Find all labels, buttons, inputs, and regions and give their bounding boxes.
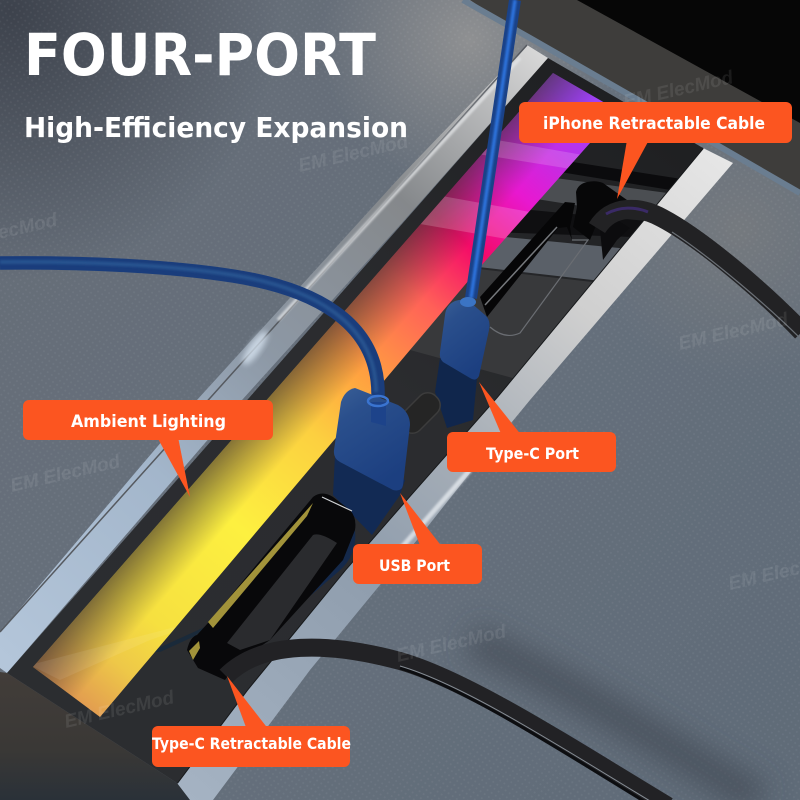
left silver trim: [0, 45, 548, 673]
callout: USB Port: USB Port: [379, 556, 450, 575]
watermarks: ElecMod: EM ElecMod: [621, 67, 736, 113]
small centre port: [395, 388, 445, 438]
title: FOUR-PORT: [24, 21, 376, 89]
callout: Type-C Retractable Cable: [152, 676, 351, 767]
upper slot: iPhone retractable port: [480, 181, 630, 335]
subtitle: High-Efficiency Expansion: [24, 111, 408, 144]
watermarks: ElecMod: EM ElecMod: [8, 451, 123, 497]
ambient light strip: [30, 73, 640, 717]
callout: Type-C Port: Type-C Port: [486, 444, 579, 463]
watermarks: ElecMod: EM ElecMod: [296, 131, 411, 177]
blue cable to Type-C plug: [471, 0, 515, 298]
callout: iPhone Retractable Cable: [519, 102, 792, 199]
lower flat cable: [226, 648, 668, 800]
callout: Ambient Lighting: Ambient Lighting: [71, 412, 226, 432]
upper flat cable: [597, 208, 800, 340]
callout: USB Port: [353, 493, 482, 584]
top-right dark backdrop: [570, 0, 800, 130]
blue-grey seam along leather: [463, 0, 800, 193]
callout: Type-C Retractable Cable: Type-C Retractable Cable: [152, 734, 351, 753]
upper leather band: [470, 0, 800, 192]
callout: iPhone Retractable Cable: iPhone Retractable Cable: [543, 114, 765, 134]
callout: Ambient Lighting: [23, 400, 273, 497]
watermarks: ElecMod: EM ElecMod: [394, 621, 509, 667]
watermarks: ElecMod: EM ElecMod: [676, 309, 791, 355]
callout: Type-C Port: [447, 382, 616, 472]
lower-left leather: [0, 672, 197, 800]
Type-C plug: [435, 297, 490, 428]
right silver trim: [177, 148, 733, 800]
watermarks: ElecMod: EM ElecMod: [62, 687, 177, 733]
USB plug: [333, 388, 410, 535]
lower slot: Type-C retractable port: [187, 494, 355, 680]
blue cable to USB plug: [0, 262, 378, 397]
